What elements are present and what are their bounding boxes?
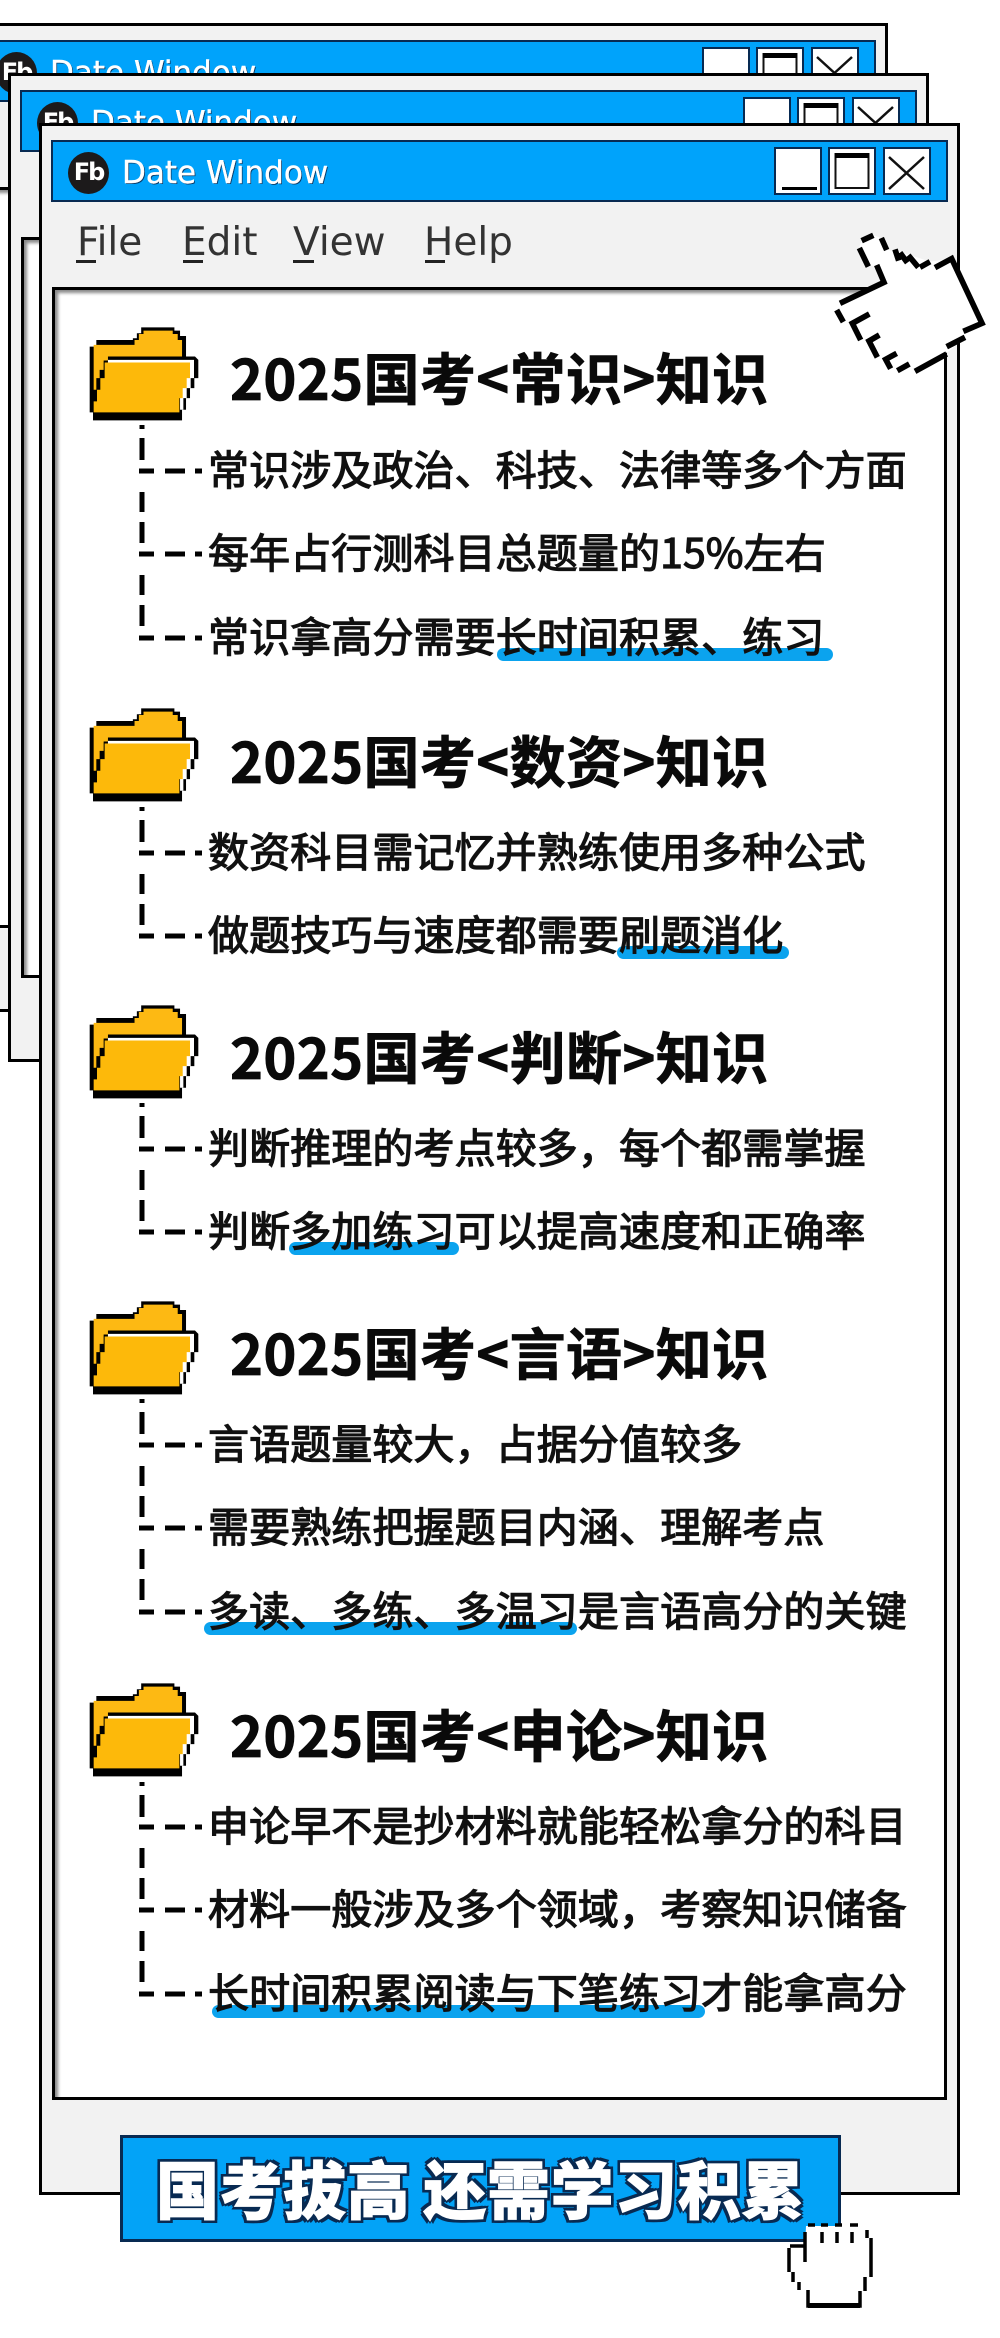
content panel bbox=[0, 187, 875, 928]
heading: 2025国考<言语>知识 bbox=[230, 1311, 768, 1392]
title bar bbox=[20, 90, 917, 152]
highlight underline bbox=[212, 2005, 705, 2018]
heading: 2025国考<申论>知识 bbox=[230, 1693, 768, 1774]
connector lines bbox=[139, 1782, 202, 1996]
list item: 判断推理的考点较多，每个都需掌握 bbox=[208, 1115, 866, 1175]
list item: 每年占行测科目总题量的15%左右 bbox=[208, 520, 826, 580]
highlight underline bbox=[497, 648, 833, 661]
maximize button bbox=[797, 97, 845, 123]
section: 数资 bbox=[90, 708, 866, 962]
section: 申论 bbox=[90, 1683, 907, 2020]
heading: 2025国考<判断>知识 bbox=[230, 1015, 768, 1096]
window title: Date Window bbox=[91, 105, 297, 141]
list item: 需要熟练把握题目内涵、理解考点 bbox=[208, 1494, 824, 1554]
section: 判断 bbox=[90, 1005, 866, 1258]
window title: Date Window bbox=[50, 55, 256, 91]
icon: folder bbox=[90, 1683, 198, 1776]
maximize button bbox=[756, 47, 804, 73]
app logo bbox=[37, 102, 78, 144]
app logo: Fb bbox=[43, 108, 72, 136]
app logo bbox=[0, 52, 37, 94]
close button bbox=[852, 97, 900, 123]
connector lines bbox=[139, 425, 202, 640]
list item: 数资科目需记忆并熟练使用多种公式 bbox=[208, 819, 866, 879]
connector lines bbox=[139, 807, 202, 938]
heading: 2025国考<数资>知识 bbox=[230, 719, 768, 800]
icon: pointer hand bottom bbox=[787, 2223, 873, 2308]
content panel bbox=[52, 287, 947, 2100]
icon: folder bbox=[90, 708, 198, 802]
menu: View: View bbox=[293, 220, 386, 265]
maximize button bbox=[828, 147, 876, 195]
list item: 长时间积累阅读与下笔练习才能拿高分 bbox=[208, 1960, 907, 2020]
list item: 常识拿高分需要长时间积累、练习 bbox=[208, 604, 824, 664]
heading: 2025国考<常识>知识 bbox=[230, 336, 768, 417]
title bar bbox=[51, 140, 948, 202]
icon: folder bbox=[90, 327, 198, 420]
menu: Help: Help bbox=[424, 220, 513, 265]
menu: File: File bbox=[77, 220, 142, 265]
list item: 做题技巧与速度都需要刷题消化 bbox=[208, 902, 783, 962]
close button bbox=[811, 47, 859, 73]
banner text: 国考拔高 还需学习积累 bbox=[156, 2142, 805, 2233]
list item: 多读、多练、多温习是言语高分的关键 bbox=[208, 1578, 907, 1638]
highlight underline bbox=[289, 1242, 459, 1255]
app logo bbox=[68, 152, 109, 194]
list item: 申论早不是抄材料就能轻松拿分的科目 bbox=[208, 1793, 907, 1853]
banner bbox=[120, 2135, 841, 2242]
highlight underline bbox=[204, 1622, 577, 1635]
minimize button bbox=[774, 147, 822, 195]
app logo: Fb bbox=[74, 158, 103, 186]
minimize button bbox=[702, 47, 750, 73]
connector lines bbox=[139, 1399, 202, 1614]
list item: 判断多加练习可以提高速度和正确率 bbox=[208, 1198, 866, 1258]
app logo: Fb bbox=[2, 58, 31, 86]
title bar bbox=[0, 40, 876, 102]
content panel bbox=[21, 237, 916, 978]
icon: pointer hand top right bbox=[834, 232, 986, 374]
list item: 常识涉及政治、科技、法律等多个方面 bbox=[208, 437, 907, 497]
window title: Date Window bbox=[122, 155, 328, 191]
section: 常识 bbox=[90, 327, 907, 664]
back window 2 bbox=[8, 73, 929, 1062]
close button bbox=[883, 147, 931, 195]
icon: folder bbox=[90, 1005, 198, 1098]
list item: 材料一般涉及多个领域，考察知识储备 bbox=[208, 1876, 907, 1936]
back window 1 bbox=[0, 23, 888, 1012]
highlight underline bbox=[617, 946, 789, 959]
menu bar bbox=[76, 220, 513, 265]
minimize button bbox=[743, 97, 791, 123]
section: 言语 bbox=[90, 1301, 907, 1638]
menu: Edit: Edit bbox=[182, 220, 258, 265]
connector lines bbox=[139, 1103, 202, 1234]
icon: folder bbox=[90, 1301, 198, 1394]
list item: 言语题量较大，占据分值较多 bbox=[208, 1411, 742, 1471]
